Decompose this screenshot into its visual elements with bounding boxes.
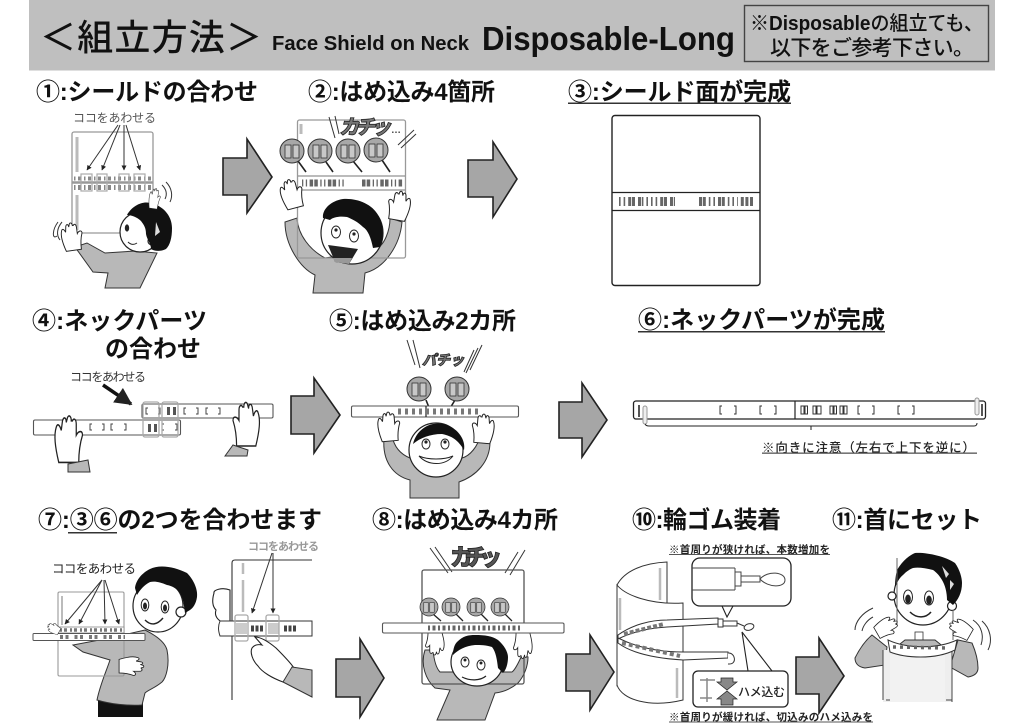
left hand [213,589,230,622]
title: 組立方法: ＜組立方法＞ [40,17,262,58]
illustration step 10: elastic band attachment [617,543,873,724]
heading step 10: ⑩:輪ゴム装着 [632,506,781,534]
right hand and sleeve [251,637,294,682]
detail bubbles [280,138,390,172]
illustration step 8: boy snapping 4 places [382,544,564,720]
illustration step 4: aligning neck parts [34,370,273,472]
note bottom: ※首周りが緩ければ、切込みのハメ込みを [669,710,873,724]
note box [744,6,988,62]
label: ココをあわせる: ココをあわせる [73,111,156,125]
subtitle: Face Shield on Neck: Face Shield on Neck [272,33,470,55]
heading step 3: ③:シールド面が完成 [568,78,791,106]
header band [29,0,995,70]
arrow 2 to 3 [468,142,517,217]
buckle [718,619,755,631]
sound word パチッ: パチッ [422,352,465,368]
illustration step 1: boy aligning shield [53,111,172,288]
subtitle: Disposable-Long: Disposable-Long [482,20,735,57]
detail bubble: snap-in: ハメ込む [738,685,785,699]
note box: 以下をご参考下さい。 [770,37,974,60]
label: ココをあわせる: ココをあわせる [70,370,146,384]
heading step 4: ④:ネックパーツ [32,308,207,335]
illustration step 7 right: detail of alignment [213,540,319,700]
illustration step 5: boy snapping neck parts [352,340,518,498]
arrow 8 to 10 [566,635,614,710]
heading step 7: ⑦:③⑥の2つを合わせます [38,507,322,534]
bracket [645,423,977,430]
illustration step 6: finished neck part [634,398,986,455]
arrow 4 to 5 [291,378,340,453]
heading step 6: ⑥:ネックパーツが完成 [638,306,885,334]
pointer arrow [103,385,131,404]
heading step 1: ①:シールドの合わせ [36,79,258,106]
detail bubble: cord loop [692,558,791,617]
detail bubble: snap-in [693,632,788,707]
arrow 10 to 11 [796,638,844,713]
sound word カチッ: カチッ [339,117,392,139]
label: ココをあわせる: ココをあわせる [52,562,136,576]
sound word カチッ: カチッ [450,544,502,570]
heading step 5: ⑤:はめ込み2カ所 [329,308,516,335]
heading step 4 [32,308,207,363]
label: ココをあわせる: ココをあわせる [248,540,319,553]
elastic straps [618,618,734,664]
illustration step 11: boy wearing shield [855,553,990,702]
arrow 5 to 6 [559,383,607,457]
illustration step 2: boy snapping 4 places: … [391,125,401,136]
illustration step 3: finished shield [612,116,760,286]
note top: ※首周りが狭ければ、本数増加を [669,543,830,556]
heading step 11: ⑪:首にセット [832,507,982,534]
heading step 2: ②:はめ込み4箇所 [308,79,495,106]
note: 向きに注意: ※向きに注意（左右で上下を逆に） [762,440,975,455]
note box: ※Disposableの組立ても、 [750,12,983,35]
arrow 1 to 2 [223,139,272,213]
heading step 8: ⑧:はめ込み4カ所 [372,507,558,534]
arrow 7 to 8 [336,639,384,717]
heading step 4: の合わせ [105,336,201,363]
illustration step 7 left: boy aligning parts [33,562,197,717]
illustration step 2: boy snapping 4 places [277,116,416,293]
